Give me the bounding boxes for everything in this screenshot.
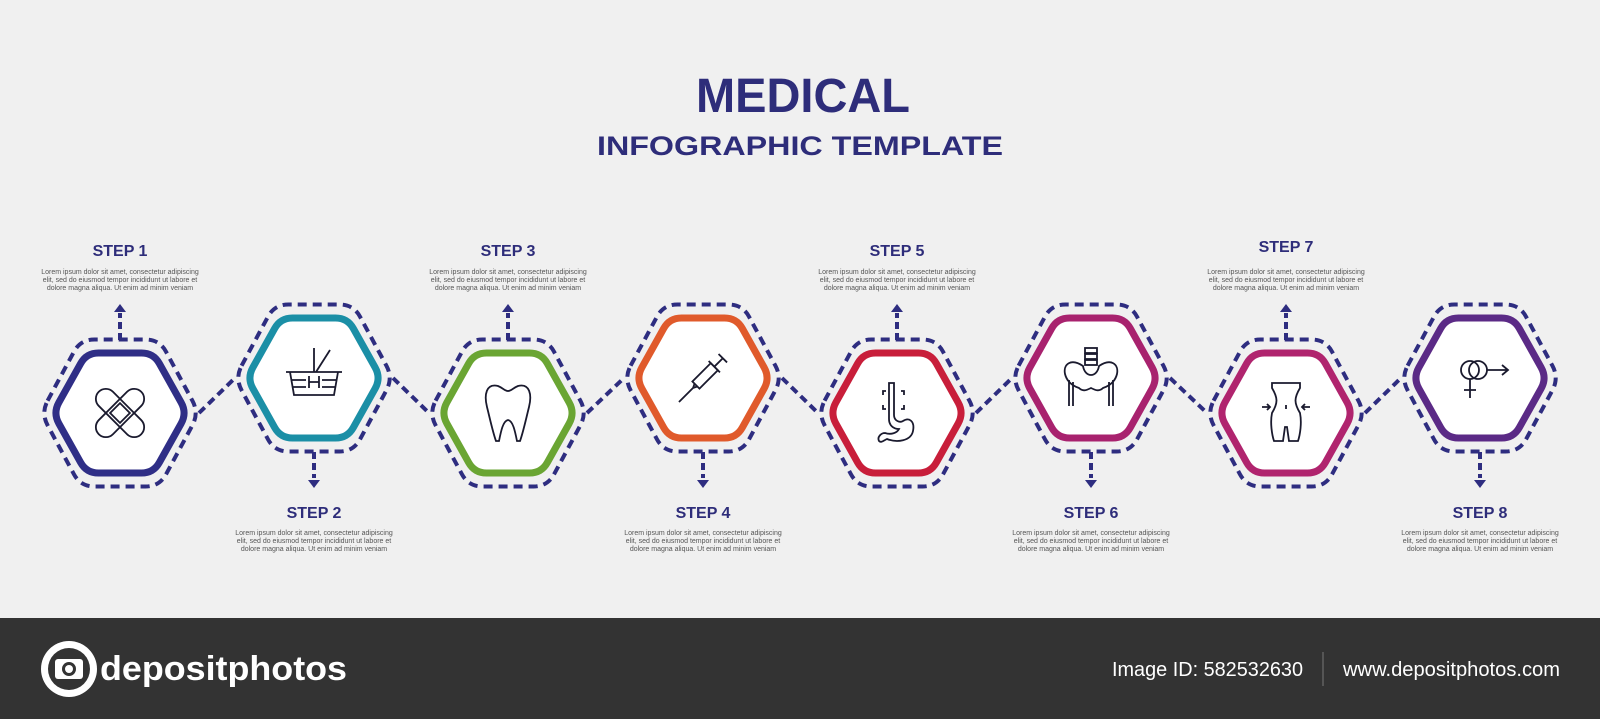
- step 2 text: Lorem ipsum dolor sit amet, consectetur adipiscing: [235, 530, 393, 537]
- step 3 text: STEP 3: [481, 243, 536, 260]
- step 6 text: STEP 6: [1064, 505, 1119, 522]
- step 4 text: STEP 4: [676, 505, 731, 522]
- step 3 text: elit, sed do eiusmod tempor incididunt ut labore et: [431, 277, 585, 284]
- step 2 text: dolore magna aliqua. Ut enim ad minim veniam: [241, 546, 387, 553]
- step 4 text: [624, 505, 782, 553]
- step 5 text: STEP 5: [870, 243, 925, 260]
- step 7 text: dolore magna aliqua. Ut enim ad minim veniam: [1213, 285, 1359, 292]
- step 5 text: Lorem ipsum dolor sit amet, consectetur adipiscing: [818, 269, 976, 276]
- footer url: www.depositphotos.com: [1342, 659, 1560, 681]
- step 3 text: [429, 243, 587, 292]
- step 7 text: elit, sed do eiusmod tempor incididunt ut labore et: [1209, 277, 1363, 284]
- step 2 text: [235, 505, 393, 553]
- step 6: [1015, 304, 1167, 488]
- step 1 text: Lorem ipsum dolor sit amet, consectetur adipiscing: [41, 269, 199, 276]
- icon: bandages: [92, 385, 148, 441]
- footer brand: depositphotos: [100, 650, 347, 688]
- step 7: [1210, 304, 1362, 486]
- step 6 text: Lorem ipsum dolor sit amet, consectetur adipiscing: [1012, 530, 1170, 537]
- step 1 text: elit, sed do eiusmod tempor incididunt ut labore et: [43, 277, 197, 284]
- title: MEDICAL: [696, 70, 910, 123]
- step 2: [238, 304, 390, 488]
- icon: stomach: [878, 383, 913, 442]
- icon: waist: [1262, 383, 1310, 441]
- step 8 text: [1401, 505, 1559, 553]
- step 1 text: dolore magna aliqua. Ut enim ad minim veniam: [47, 285, 193, 292]
- step 8: [1404, 304, 1556, 488]
- step 1 text: STEP 1: [93, 243, 148, 260]
- step 3: [432, 304, 584, 486]
- icon: syringe: [673, 353, 728, 408]
- icon: tooth: [486, 386, 530, 441]
- step 4 text: Lorem ipsum dolor sit amet, consectetur adipiscing: [624, 530, 782, 537]
- icon: pelvis: [1065, 348, 1117, 406]
- step 3 text: Lorem ipsum dolor sit amet, consectetur adipiscing: [429, 269, 587, 276]
- step 7 text: Lorem ipsum dolor sit amet, consectetur adipiscing: [1207, 269, 1365, 276]
- step 1: [44, 304, 196, 486]
- step 7 text: [1207, 239, 1365, 292]
- step 1 text: [41, 243, 199, 292]
- step 4 text: dolore magna aliqua. Ut enim ad minim veniam: [630, 546, 776, 553]
- step 7 text: STEP 7: [1259, 239, 1314, 256]
- subtitle: INFOGRAPHIC TEMPLATE: [597, 131, 1003, 161]
- step 8 text: STEP 8: [1453, 505, 1508, 522]
- step 5 text: dolore magna aliqua. Ut enim ad minim veniam: [824, 285, 970, 292]
- icon: gender symbols: [1461, 361, 1508, 398]
- step 3 text: dolore magna aliqua. Ut enim ad minim veniam: [435, 285, 581, 292]
- step 8 text: dolore magna aliqua. Ut enim ad minim veniam: [1407, 546, 1553, 553]
- step 8 text: elit, sed do eiusmod tempor incididunt ut labore et: [1403, 538, 1557, 545]
- step 8 text: Lorem ipsum dolor sit amet, consectetur adipiscing: [1401, 530, 1559, 537]
- step 4: [627, 304, 779, 488]
- connectors: [199, 378, 1401, 413]
- footer bar: [0, 618, 1600, 719]
- step 5 text: elit, sed do eiusmod tempor incididunt ut labore et: [820, 277, 974, 284]
- step 2 text: elit, sed do eiusmod tempor incididunt ut labore et: [237, 538, 391, 545]
- step 5: [821, 304, 973, 486]
- step 6 text: [1012, 505, 1170, 553]
- step 6 text: elit, sed do eiusmod tempor incididunt ut labore et: [1014, 538, 1168, 545]
- icon: basket: [286, 348, 342, 395]
- step 6 text: dolore magna aliqua. Ut enim ad minim veniam: [1018, 546, 1164, 553]
- footer image id: Image ID: 582532630: [1112, 659, 1303, 681]
- step 4 text: elit, sed do eiusmod tempor incididunt ut labore et: [626, 538, 780, 545]
- footer logo: [41, 641, 97, 697]
- step 5 text: [818, 243, 976, 292]
- step 2 text: STEP 2: [287, 505, 342, 522]
